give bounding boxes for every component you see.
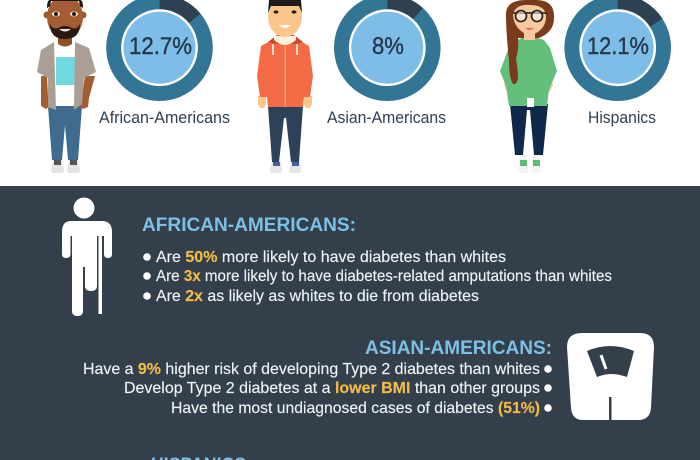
panel: dark facts section — [0, 186, 700, 460]
donut chart: Asian-Americans 8%: 8% — [372, 33, 404, 60]
list: African-American facts: Are 2x as likely as whites to die from diabetes — [156, 288, 479, 305]
list: African-American facts: Are 3x more likely to have diabetes-related amputations than whites — [156, 268, 612, 285]
list: Asian-American facts — [83, 361, 552, 417]
heading: Asian-Americans: ASIAN-AMERICANS: — [365, 337, 552, 359]
heading: African-Americans: AFRICAN-AMERICANS: — [142, 214, 356, 236]
list: Asian-American facts: Have a 9% higher risk of developing Type 2 diabetes than whites — [83, 361, 540, 378]
character: Hispanic woman — [500, 0, 557, 173]
list: African-American facts — [143, 249, 612, 305]
icon: weighing scale — [567, 333, 654, 420]
list: Asian-American facts: Have the most undiagnosed cases of diabetes (51%) — [171, 400, 540, 417]
label: African-Americans: African-Americans — [99, 109, 230, 127]
label: Hispanics: Hispanics — [588, 109, 656, 127]
character: Asian-American man — [257, 0, 313, 173]
list: Asian-American facts: Develop Type 2 diabetes at a lower BMI than other groups — [124, 380, 540, 397]
list: African-American facts: Are 50% more likely to have diabetes than whites — [156, 249, 506, 266]
donut chart: Hispanics 12.1% — [564, 0, 671, 101]
donut chart: Asian-Americans 8% — [334, 0, 441, 101]
donut chart: African-Americans 12.7%: 12.7% — [129, 33, 192, 60]
donut chart: African-Americans 12.7% — [106, 0, 213, 101]
label: Asian-Americans: Asian-Americans — [327, 109, 446, 127]
donut chart: Hispanics 12.1%: 12.1% — [587, 33, 649, 60]
icon: person with amputated leg and crutch — [62, 198, 112, 316]
character: African-American man — [37, 0, 96, 173]
